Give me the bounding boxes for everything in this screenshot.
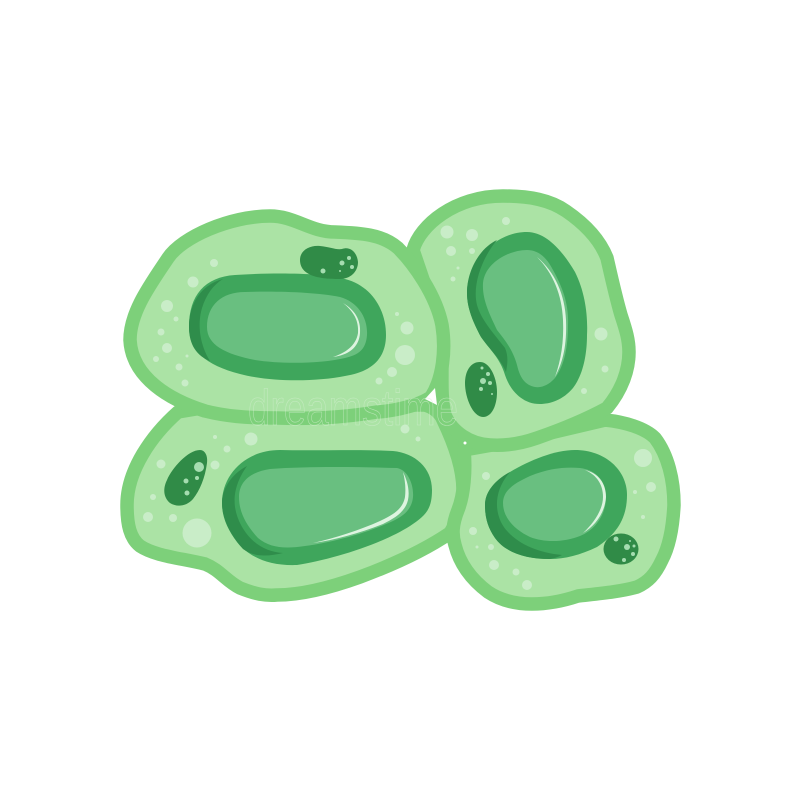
nucleus: top left <box>189 274 386 380</box>
cell: bottom right <box>453 420 674 604</box>
vesicles: bottom left <box>143 424 420 548</box>
vesicles: top left <box>153 259 415 386</box>
nucleus: bottom right <box>485 450 627 559</box>
cell: bottom left <box>127 405 463 595</box>
vesicles: top right <box>440 217 608 394</box>
vesicles: bottom right <box>469 449 656 590</box>
cell wall: bottom right <box>453 420 674 604</box>
nucleus: bottom left <box>222 450 432 565</box>
organelle: top left <box>300 246 358 279</box>
cell: top right <box>413 196 629 445</box>
cell wall: top left <box>130 216 444 418</box>
organelle: bottom left <box>164 450 207 506</box>
cell wall: top right <box>413 196 629 445</box>
nucleus: top right <box>467 232 587 404</box>
cell: top left <box>130 216 444 418</box>
watermark text: dreamstime <box>248 380 458 436</box>
gap between cells <box>425 388 468 448</box>
cell wall: bottom left <box>127 405 463 595</box>
organelle: bottom right <box>604 534 638 564</box>
organelle: top right <box>465 362 497 417</box>
